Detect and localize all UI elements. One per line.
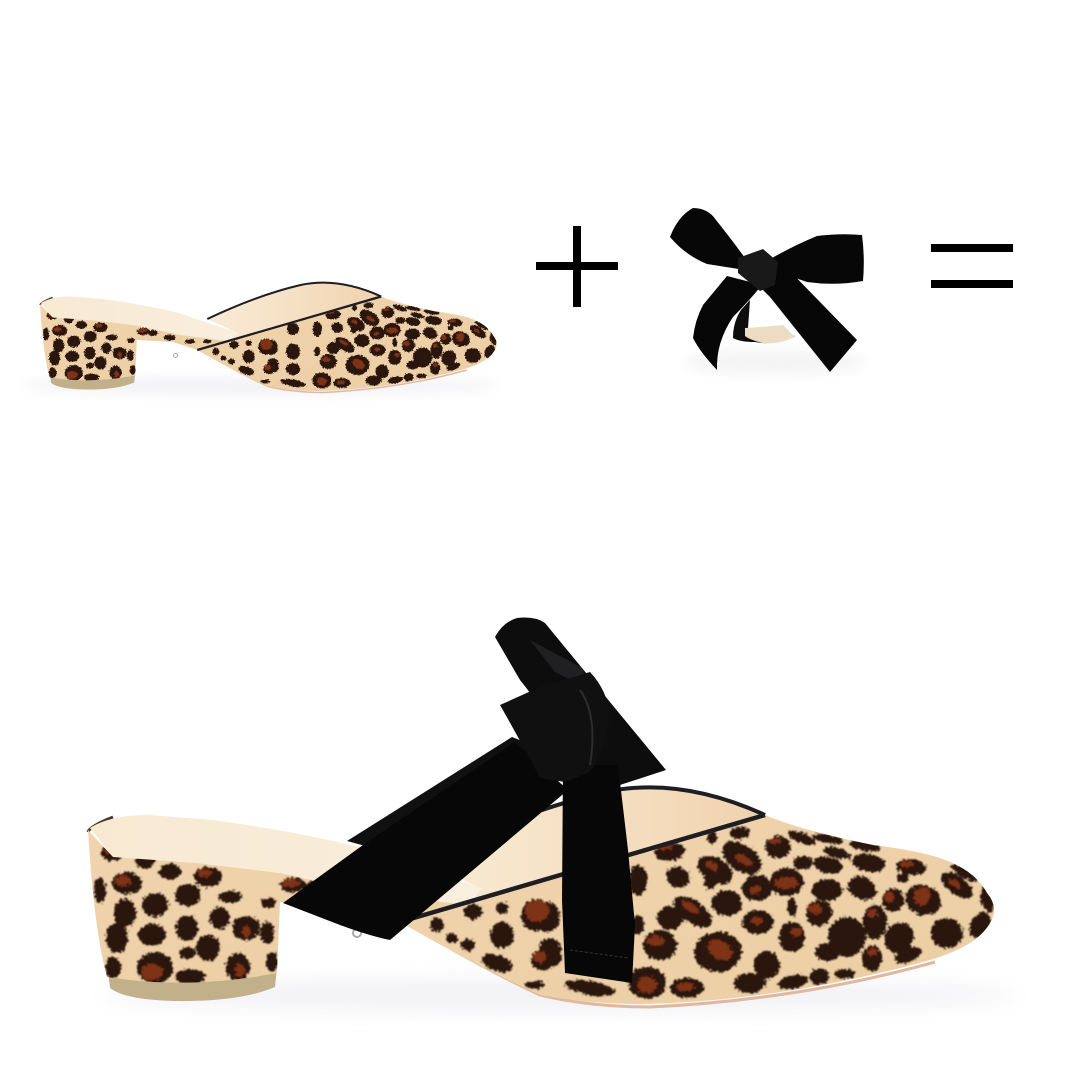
vertical ribbon tail	[562, 765, 635, 983]
upper bow loop	[495, 618, 666, 785]
shadow: bow	[685, 349, 865, 375]
large mule with velvet bow	[88, 618, 996, 1007]
back ribbon band	[347, 737, 570, 870]
bow left loop	[670, 208, 745, 270]
bow lower-right tail	[758, 264, 857, 372]
bow strap ring	[733, 300, 795, 343]
large leopard mule	[88, 787, 996, 1007]
velvet bow accessory	[670, 208, 864, 372]
satin loop highlight	[530, 640, 590, 690]
shadow: small mule	[20, 377, 500, 395]
icon: equals	[931, 244, 1013, 288]
shadow: large mule	[100, 979, 1020, 1011]
bow lower-left tail	[693, 276, 762, 370]
bow knot	[738, 249, 778, 291]
infographic canvas: mule + bow = styled mule	[39, 208, 1013, 1008]
tail stitching	[570, 950, 628, 958]
main velvet band	[283, 742, 568, 940]
small leopard mule	[40, 283, 498, 392]
bow right loop	[772, 234, 864, 284]
bow insole patch	[745, 325, 795, 343]
knot fold	[580, 690, 592, 765]
ribbon knot	[500, 672, 610, 782]
icon: plus	[536, 226, 618, 307]
